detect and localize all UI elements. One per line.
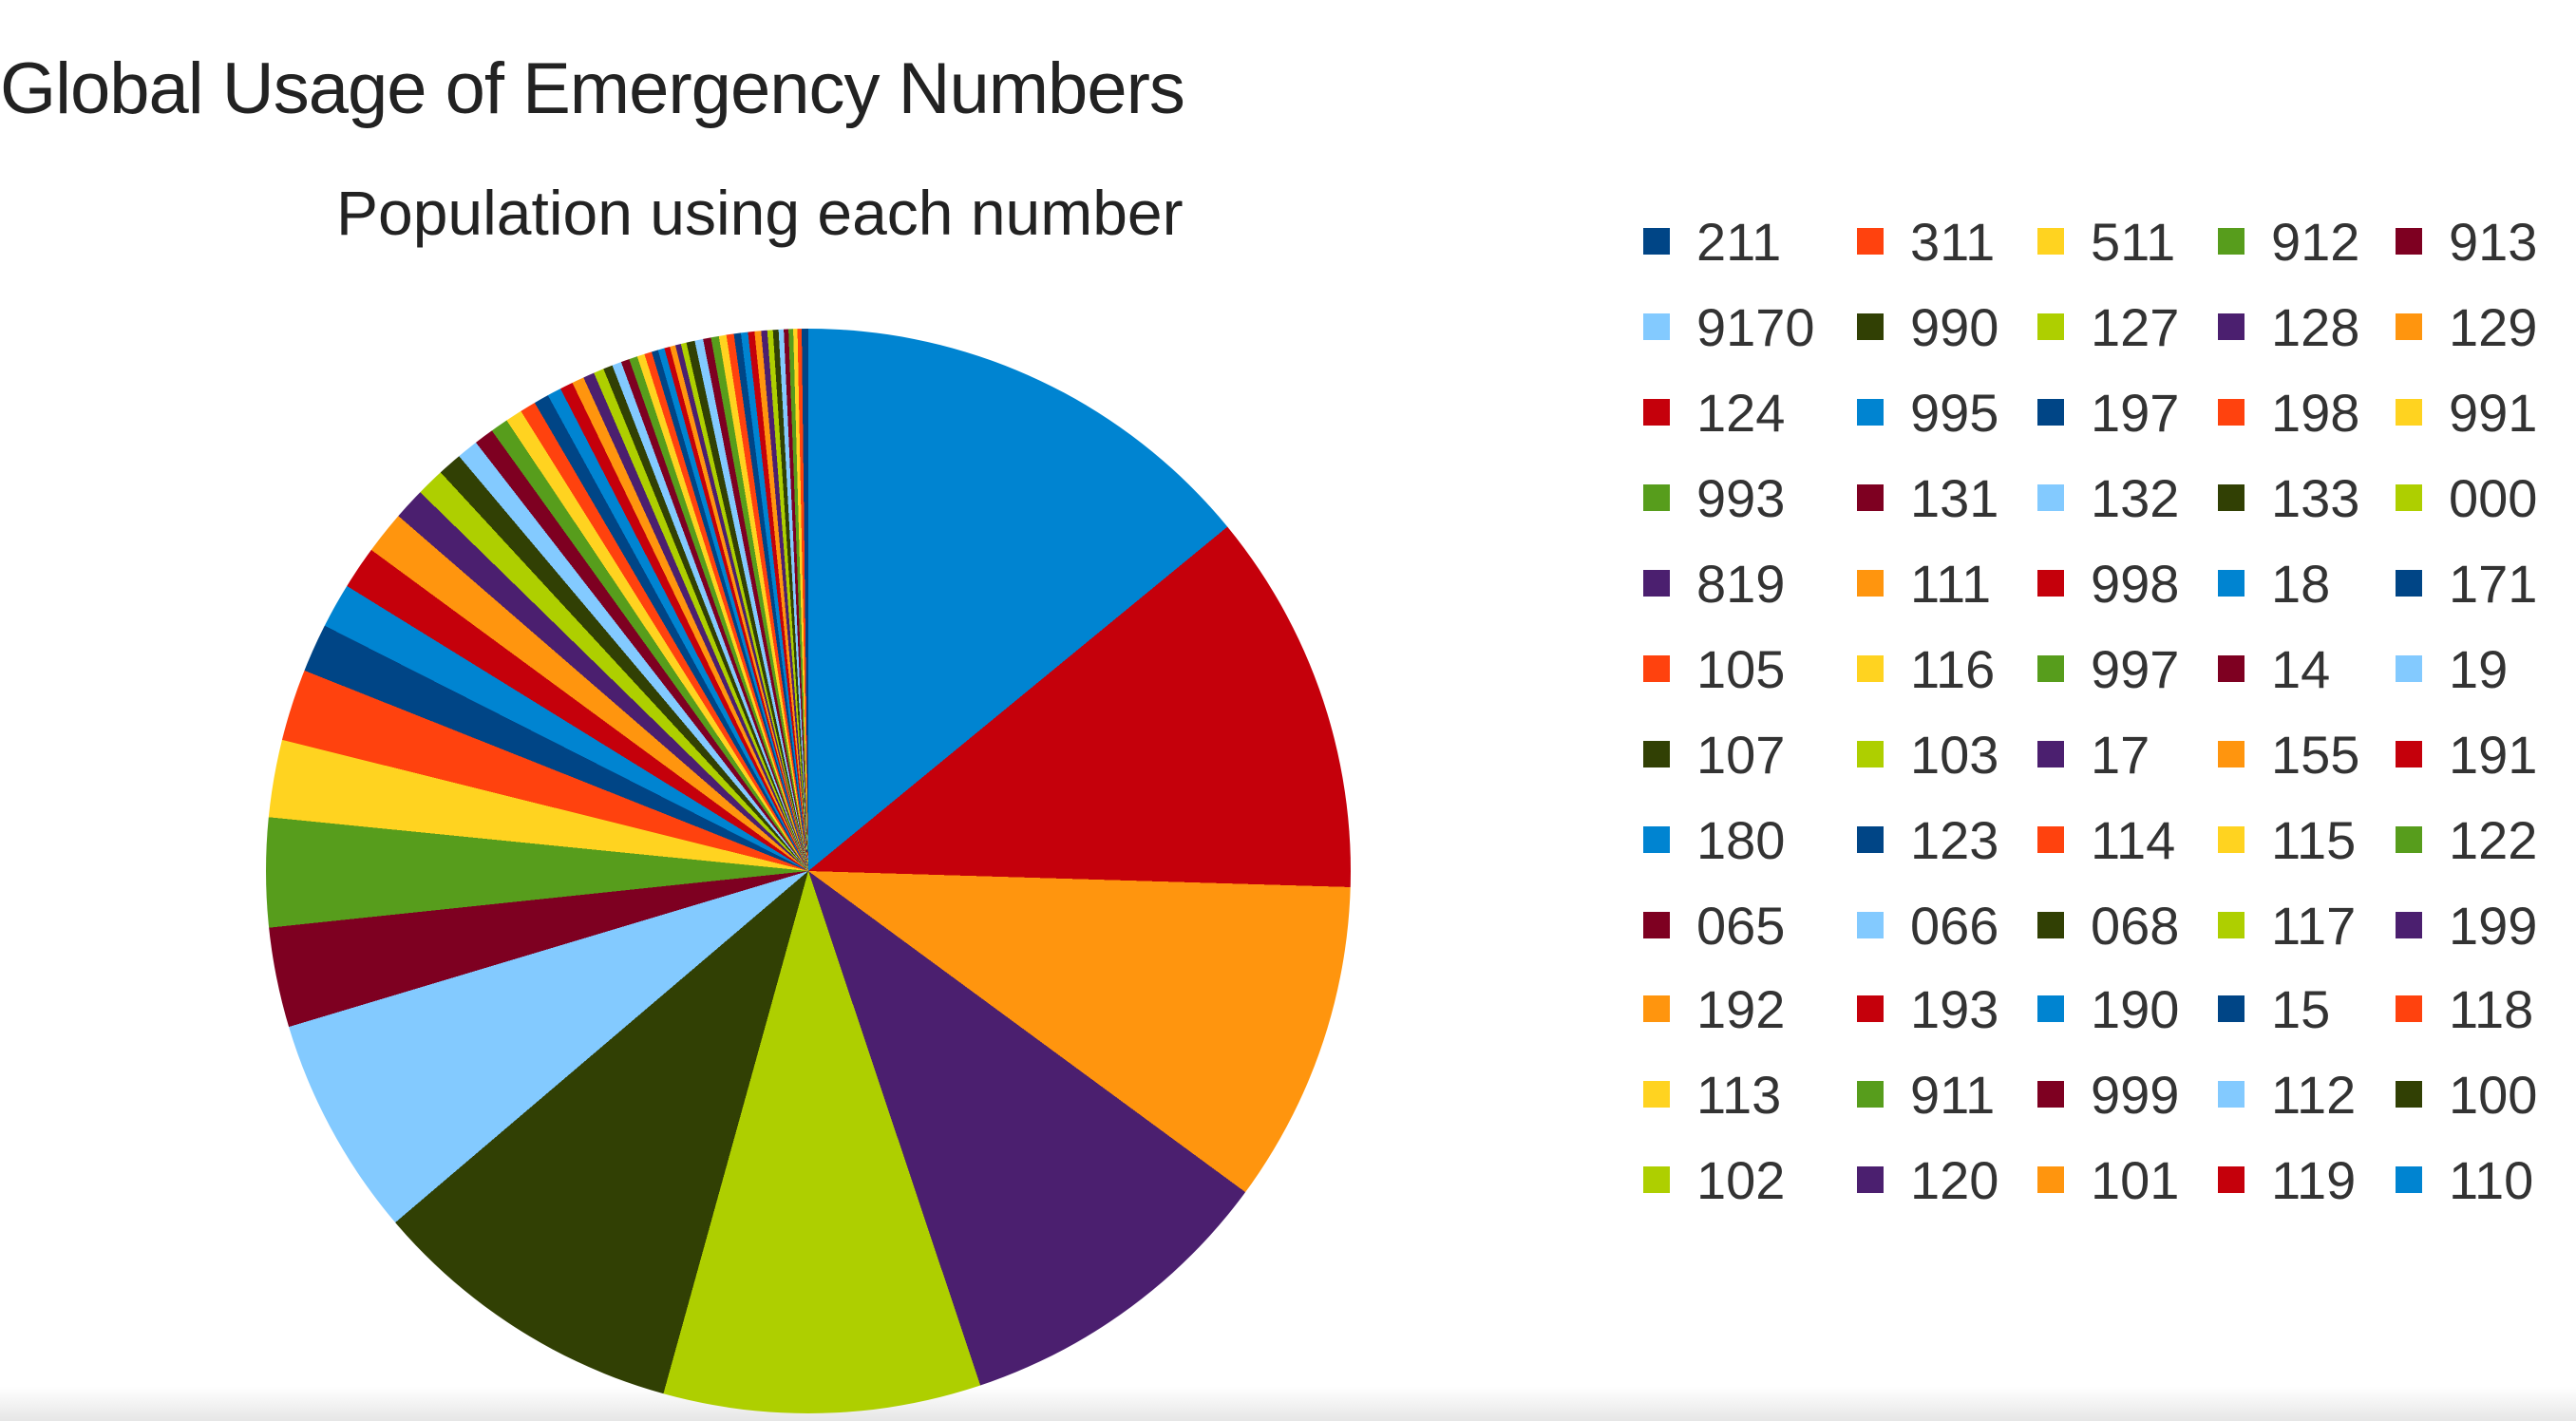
legend: 18 [2271,554,2330,614]
legend: 193 [1910,979,1998,1039]
pie chart [266,329,1351,1413]
legend: 155 [2271,725,2359,785]
legend: 995 [1910,383,1998,443]
legend: 066 [1910,896,1998,956]
legend: 118 [2449,979,2533,1039]
legend: 14 [2271,639,2330,699]
legend: 103 [1910,725,1998,785]
legend: 17 [2091,725,2150,785]
legend: 114 [2091,810,2175,870]
legend: 112 [2271,1065,2356,1125]
legend: 993 [1696,468,1785,528]
legend: 819 [1696,554,1785,614]
legend: 123 [1910,810,1998,870]
legend: 132 [2091,468,2179,528]
legend: 124 [1696,383,1785,443]
title: Global Usage of Emergency Numbers [0,48,1184,129]
legend: 197 [2091,383,2179,443]
legend: 105 [1696,639,1785,699]
legend: 997 [2091,639,2179,699]
legend: 911 [1910,1065,1995,1125]
legend: 129 [2449,297,2537,357]
legend: 199 [2449,896,2537,956]
legend: 171 [2449,554,2537,614]
legend: 117 [2271,896,2356,956]
legend: 107 [1696,725,1785,785]
legend: 190 [2091,979,2179,1039]
legend: 116 [1910,639,1995,699]
legend: 19 [2449,639,2508,699]
legend: 311 [1910,212,1995,272]
legend: 113 [1696,1065,1781,1125]
legend: 192 [1696,979,1785,1039]
legend: 131 [1910,468,1998,528]
legend: 191 [2449,725,2537,785]
legend: 211 [1696,212,1781,272]
legend: 102 [1696,1150,1785,1210]
legend: 912 [2271,212,2359,272]
subtitle: Population using each number [336,178,1184,248]
legend: 128 [2271,297,2359,357]
legend: 990 [1910,297,1998,357]
legend: 9170 [1696,297,1815,357]
legend: 122 [2449,810,2537,870]
legend: 198 [2271,383,2359,443]
legend: 991 [2449,383,2537,443]
legend: 110 [2449,1150,2533,1210]
legend: 180 [1696,810,1785,870]
legend: 999 [2091,1065,2179,1125]
legend: 115 [2271,810,2356,870]
legend: 998 [2091,554,2179,614]
legend: 000 [2449,468,2537,528]
legend: 511 [2091,212,2175,272]
legend: 120 [1910,1150,1998,1210]
legend: 15 [2271,979,2330,1039]
legend: 100 [2449,1065,2537,1125]
bottom gray shadow [0,1387,2576,1421]
legend: 133 [2271,468,2359,528]
legend: 101 [2091,1150,2179,1210]
legend: 111 [1910,554,1991,614]
legend: 068 [2091,896,2179,956]
legend: 119 [2271,1150,2356,1210]
legend: 127 [2091,297,2179,357]
legend: 913 [2449,212,2537,272]
legend: 065 [1696,896,1785,956]
legend [1643,212,2537,1210]
